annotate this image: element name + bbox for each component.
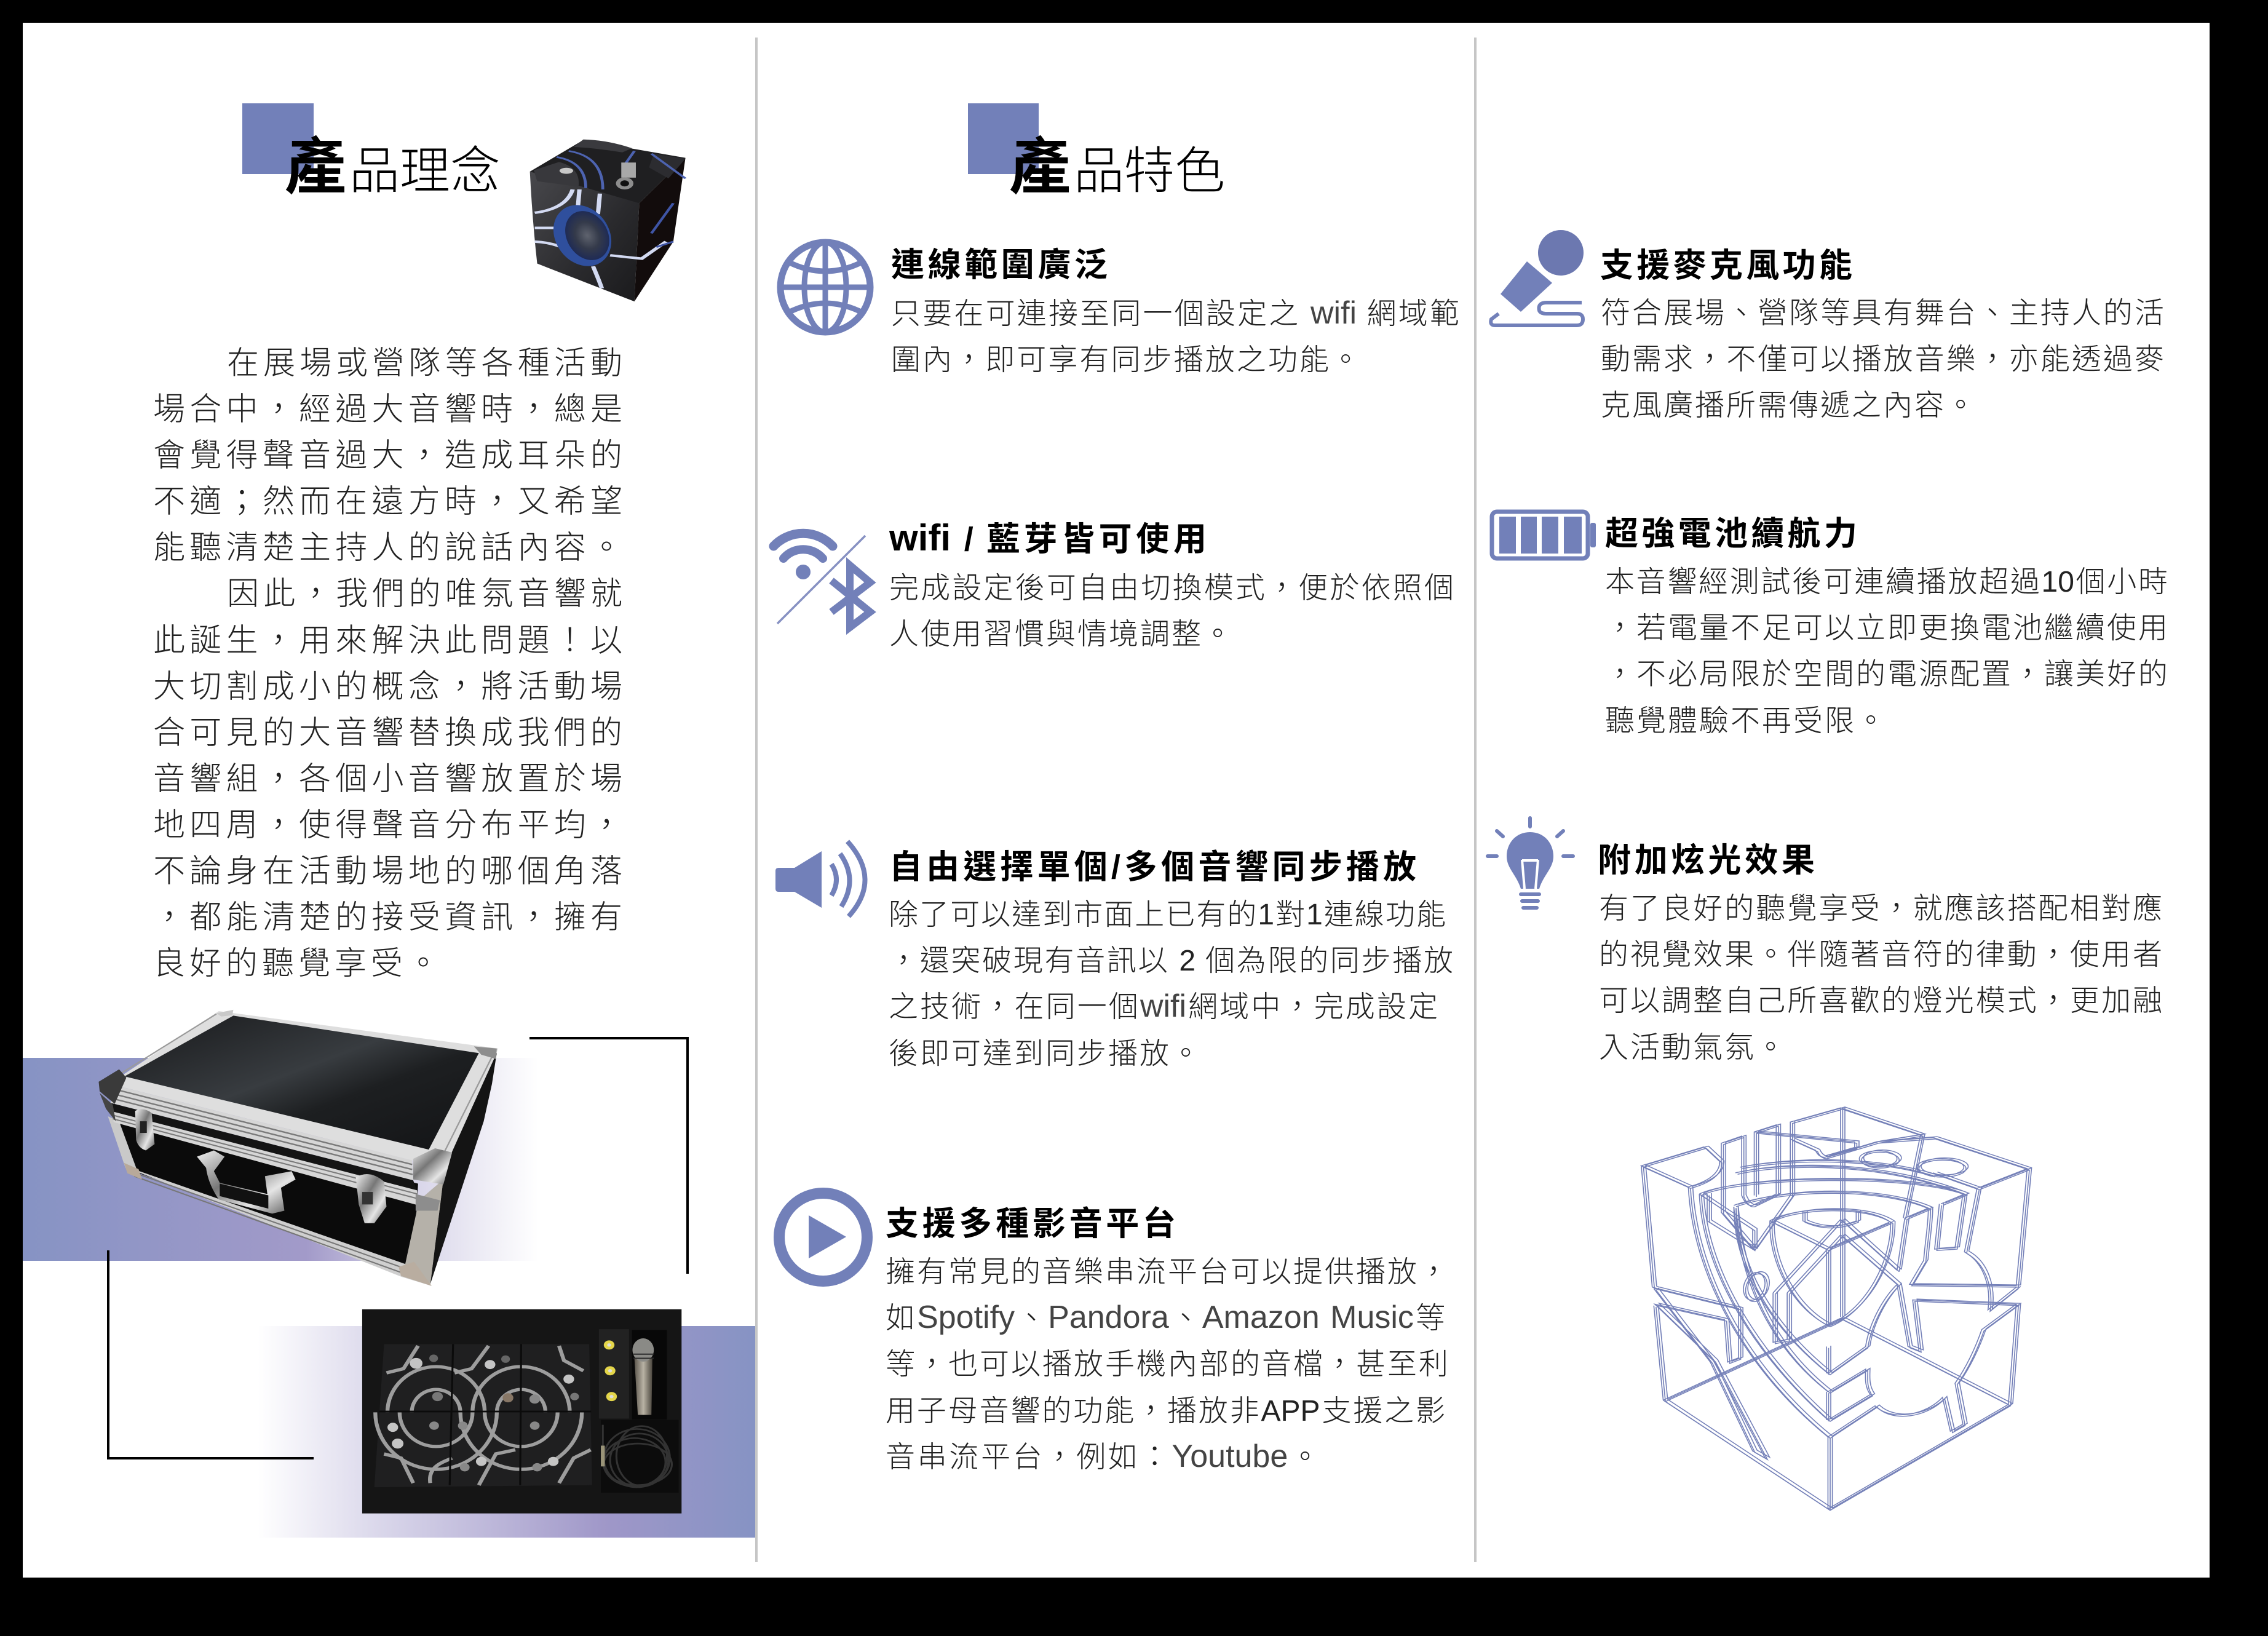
bracket line: bottom left (108, 1250, 314, 1458)
wireframe speaker cube (1641, 1107, 2032, 1511)
text: multiple platforms: 用子母音響的功能，播放非APP支援之影 (886, 1395, 1445, 1428)
text: wifi and bluetooth (889, 572, 1454, 651)
text: multiple platforms: 擁有常見的音樂串流平台可以提供播放， (886, 1256, 1448, 1289)
heading: sync playback: 自由選擇單個/多個音響同步播放 (889, 849, 1416, 886)
text: multiple platforms: 等，也可以播放手機內部的音檔，甚至利 (886, 1348, 1448, 1381)
text: microphone support: 克風廣播所需傳遞之內容。 (1601, 389, 1975, 422)
column divider 2 (1474, 38, 1477, 1562)
text: battery life: ，不必局限於空間的電源配置，讓美好的 (1605, 658, 2168, 691)
text: microphone support (1601, 297, 2164, 422)
text: multiple platforms: 音串流平台，例如：Youtube。 (886, 1439, 1320, 1474)
heading: multiple platforms: 支援多種影音平台 (886, 1205, 1176, 1242)
text: sync playback: 後即可達到同步播放。 (889, 1038, 1200, 1070)
text: wide connection range: 圍內，即可享有同步播放之功能。 (891, 344, 1360, 376)
text: light effects: 入活動氣氛。 (1599, 1031, 1785, 1064)
text: wifi and bluetooth: 人使用習慣與情境調整。 (889, 618, 1232, 651)
photo: speaker cube (530, 140, 686, 301)
icon: globe (780, 242, 870, 332)
icon: wifi and bluetooth (774, 533, 870, 627)
text: sync playback: 之技術，在同一個wifi網域中，完成設定 (889, 988, 1438, 1024)
photo: foam tray with speakers, microphone and cable (362, 1309, 681, 1514)
text: battery life: ，若電量不足可以立即更換電池繼續使用 (1605, 612, 2168, 645)
text: sync playback (889, 899, 1453, 1070)
text block: product concept body: 能聽清楚主持人的說話內容。 (153, 530, 622, 566)
text: battery life: 聽覺體驗不再受限。 (1605, 705, 1885, 737)
text: light effects: 可以調整自己所喜歡的燈光模式，更加融 (1599, 985, 2162, 1017)
text: battery life: 本音響經測試後可連續播放超過10個小時 (1605, 566, 2168, 598)
text block: product concept body: 地四周，使得聲音分布平均， (153, 808, 622, 843)
text block: product concept body: 場合中，經過大音響時，總是 (153, 392, 622, 427)
text: sync playback: ，還突破現有音訊以 2 個為限的同步播放 (889, 945, 1453, 977)
text: microphone support: 動需求，不僅可以播放音樂，亦能透過麥 (1601, 343, 2164, 376)
text block: product concept body: 音響組，各個小音響放置於場 (153, 761, 622, 797)
text block: product concept body: ，都能清楚的接受資訊，擁有 (153, 900, 622, 935)
text: light effects: 有了良好的聽覺享受，就應該搭配相對應 (1599, 892, 2162, 925)
text block: product concept body: 此誕生，用來解決此問題！以 (153, 623, 622, 659)
text block: product concept body: 不適；然而在遠方時，又希望 (153, 484, 622, 520)
text: multiple platforms: 如Spotify、Pandora、Amazon Music等 (886, 1300, 1445, 1335)
title: product concept: 產品理念 (285, 133, 501, 202)
text: light effects (1599, 892, 2162, 1064)
text block: product concept body: 不論身在活動場地的哪個角落 (153, 854, 622, 889)
icon: play button (779, 1193, 867, 1281)
text: multiple platforms (886, 1256, 1448, 1474)
text: battery life (1605, 566, 2168, 737)
gradient band: behind case (23, 1058, 538, 1261)
heading: wide connection range: 連線範圍廣泛 (891, 247, 1108, 284)
text block: product concept body: 良好的聽覺享受。 (153, 946, 439, 982)
heading square: product features (968, 103, 1039, 174)
text block: product concept body (153, 346, 622, 982)
text block: product concept body: 因此，我們的唯氛音響就 (227, 576, 622, 612)
heading square: product concept (242, 103, 314, 174)
heading: battery life: 超強電池續航力 (1605, 515, 1857, 552)
photo: flight case (98, 1010, 498, 1286)
text: wide connection range: 只要在可連接至同一個設定之 wifi 網域範 (891, 295, 1459, 331)
icon: microphone (1491, 230, 1584, 325)
text block: product concept body: 會覺得聲音過大，造成耳朵的 (153, 438, 622, 474)
text: light effects: 的視覺效果。伴隨著音符的律動，使用者 (1599, 939, 2162, 971)
heading: microphone support: 支援麥克風功能 (1600, 247, 1852, 284)
icon: speaker (775, 841, 865, 916)
heading: light effects: 附加炫光效果 (1598, 842, 1815, 879)
icon: light bulb (1488, 818, 1573, 908)
heading: wifi and bluetooth: wifi / 藍芽皆可使用 (889, 517, 1207, 558)
text: wifi and bluetooth: 完成設定後可自由切換模式，便於依照個 (889, 572, 1454, 605)
text block: product concept body: 合可見的大音響替換成我們的 (153, 715, 622, 751)
text: wide connection range (891, 295, 1459, 376)
title: product features: 產品特色 (1009, 133, 1225, 202)
column divider 1 (755, 38, 758, 1562)
text: microphone support: 符合展場、營隊等具有舞台、主持人的活 (1601, 297, 2164, 330)
text block: product concept body: 大切割成小的概念，將活動場 (153, 669, 622, 705)
gradient band: behind tray (258, 1326, 756, 1538)
icon: battery (1492, 512, 1596, 558)
text: sync playback: 除了可以達到市面上已有的1對1連線功能 (889, 899, 1446, 931)
bracket line: top right (529, 1038, 688, 1274)
text block: product concept body: 在展場或營隊等各種活動 (227, 346, 622, 381)
